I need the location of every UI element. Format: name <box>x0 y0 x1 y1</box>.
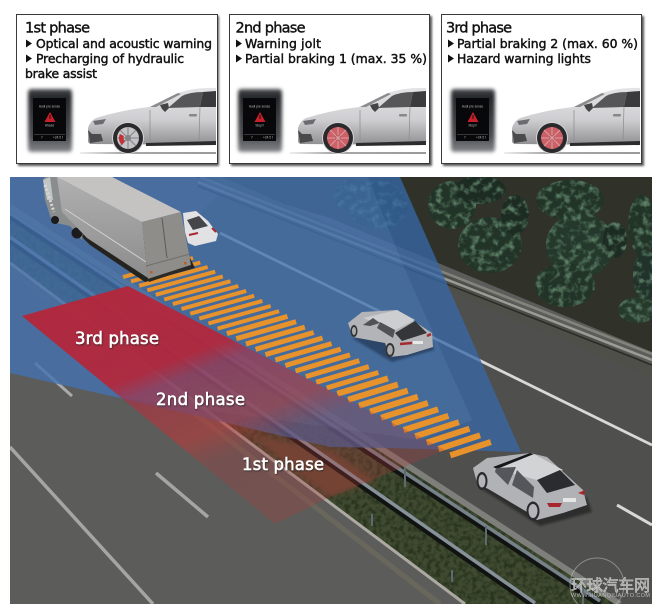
watermark <box>570 558 650 604</box>
truck <box>43 177 195 282</box>
heading: 2nd phase: 2nd phase <box>236 20 306 36</box>
icon: dashboard warning display <box>238 89 282 152</box>
text: 3rd phase bullets: Partial braking 2 (max. 60 %) <box>457 36 638 51</box>
text: 1st phase bullets <box>25 36 212 81</box>
blue radar sensor field <box>10 177 521 452</box>
icon: car side view with caliper highlighted <box>80 88 216 154</box>
watermark: WWW.HUANQIUAUTO.COM <box>571 593 650 599</box>
icon: dashboard warning display: Stop!! <box>468 124 477 128</box>
text: 3rd phase bullets <box>448 36 638 66</box>
lane markings <box>10 233 652 604</box>
icon: dashboard warning display: Stop!! <box>255 124 264 128</box>
darker far road surface <box>386 292 652 604</box>
icon: car side view with brake disc highlighted <box>504 88 640 154</box>
label: 2nd phase: 2nd phase <box>156 390 245 409</box>
panel: 1st phase <box>16 14 219 166</box>
text: 2nd phase bullets <box>236 36 427 66</box>
orange warning stripes on road <box>123 258 491 455</box>
text: 3rd phase bullets: Hazard warning lights <box>457 51 591 66</box>
icon: dashboard warning display: Ahead <box>45 124 54 128</box>
heading: 1st phase: 1st phase <box>25 20 90 36</box>
panel: 3rd phase <box>442 14 644 166</box>
text: 2nd phase bullets: Partial braking 1 (max. 35 %) <box>245 51 427 66</box>
silver ego car <box>473 453 592 526</box>
red brake phase zones <box>22 286 445 524</box>
label: 3rd phase: 3rd phase <box>75 329 159 348</box>
icon: car side view with brake disc highlighted <box>290 88 426 154</box>
small white car ahead <box>183 211 218 246</box>
icon: dashboard warning display <box>451 89 495 152</box>
heading: 3rd phase: 3rd phase <box>446 20 512 36</box>
icon: dashboard warning display <box>28 89 72 152</box>
text: 2nd phase bullets: Warning jolt <box>245 36 321 51</box>
silver middle car <box>348 310 434 362</box>
text: 1st phase bullets: Optical and acoustic warning <box>36 36 212 51</box>
upper guardrail <box>198 177 652 378</box>
orchard trees <box>195 176 658 352</box>
text: 1st phase bullets: brake assist <box>25 66 97 81</box>
panel: 2nd phase <box>230 14 432 166</box>
text: 1st phase bullets: Precharging of hydraulic <box>36 51 184 66</box>
road scene illustration <box>10 176 658 612</box>
label: 1st phase: 1st phase <box>242 455 324 474</box>
watermark: 环球汽车网 <box>571 577 650 595</box>
central median with guardrails <box>10 207 620 607</box>
